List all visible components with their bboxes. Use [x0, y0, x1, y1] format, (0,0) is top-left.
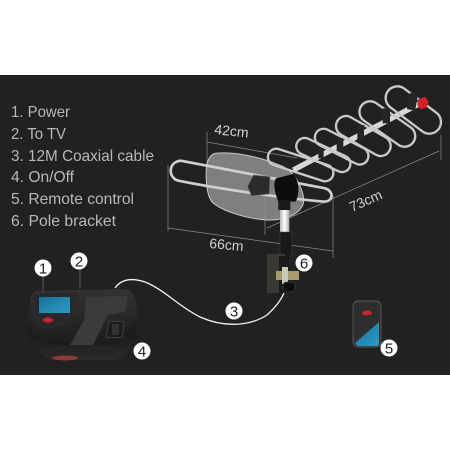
antenna [171, 82, 446, 233]
dimension label: 73cm: 73cm [347, 186, 384, 215]
director elements [266, 82, 446, 183]
power button [43, 318, 53, 322]
dimension label: 66cm: 66cm [209, 235, 244, 254]
red glow [52, 356, 78, 360]
dimension lines [168, 132, 441, 258]
callout 5: 5 [385, 340, 393, 358]
mast [280, 232, 292, 256]
parts list: 5. Remote control [11, 191, 134, 208]
parts list: 4. On/Off [11, 169, 75, 186]
callout 3 [226, 302, 242, 320]
pole bracket [267, 254, 299, 294]
callout 4: 4 [138, 344, 146, 360]
callout leader lines [43, 270, 80, 291]
callout 6: 6 [300, 256, 308, 272]
callout 1 [34, 260, 52, 278]
callout 2: 2 [75, 254, 83, 270]
power supply label [39, 297, 70, 313]
element clamps [318, 93, 418, 158]
coaxial cable [115, 280, 284, 324]
parts list [11, 104, 154, 230]
driven dipole loop [171, 161, 332, 202]
callout 2 [70, 252, 88, 270]
callout 1: 1 [39, 260, 47, 278]
white mast section [280, 210, 289, 233]
callout 6 [296, 254, 312, 272]
callout 5 [380, 340, 398, 358]
callout 3: 3 [230, 304, 238, 320]
red end cap [417, 97, 429, 109]
parts list: 1. Power [11, 104, 71, 121]
reflector paddle [206, 153, 304, 220]
parts list: 2. To TV [11, 126, 66, 143]
remote control [353, 301, 381, 347]
callout 4 [134, 342, 150, 360]
parts list: 3. 12M Coaxial cable [11, 148, 154, 165]
parts list: 6. Pole bracket [11, 213, 117, 230]
boom [293, 103, 420, 170]
dark background panel [0, 75, 450, 375]
rotor head [274, 174, 298, 202]
dimension label: 42cm: 42cm [214, 121, 249, 141]
dipole bracket [247, 175, 270, 196]
power supply box [28, 289, 137, 360]
on/off switch [106, 321, 124, 338]
callout circles [34, 252, 398, 360]
